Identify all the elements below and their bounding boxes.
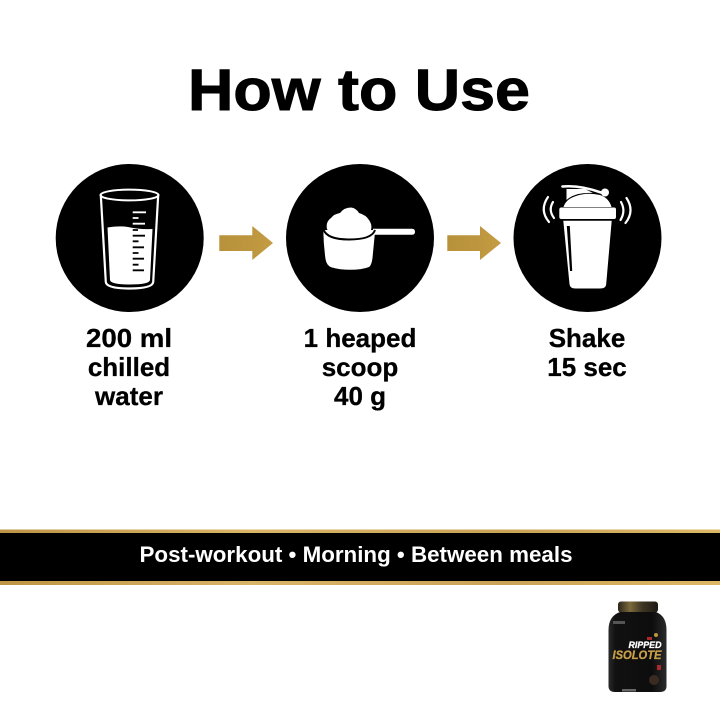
arrow: step 1 to 2 xyxy=(219,226,273,260)
icon: glass of water xyxy=(56,164,204,312)
label: 200 ml chilled water: water xyxy=(94,381,163,411)
step 2: scoop xyxy=(286,164,434,411)
label: Shake 15 sec: 15 sec xyxy=(547,352,627,382)
product jar: ISOLOTE xyxy=(612,648,662,662)
label: 200 ml chilled water: chilled xyxy=(88,352,170,382)
step 1: water xyxy=(56,164,204,411)
label: 200 ml chilled water xyxy=(86,323,172,411)
label: 1 heaped scoop 40 g xyxy=(304,323,416,411)
arrow: step 2 to 3 xyxy=(447,226,501,260)
label: 200 ml chilled water: 200 ml xyxy=(86,323,172,353)
product jar: RIPPED xyxy=(628,640,662,651)
banner text: Post-workout • Morning • Between meals xyxy=(140,542,572,567)
product jar xyxy=(608,602,666,692)
label: 1 heaped scoop 40 g: scoop xyxy=(322,352,398,382)
icon: shaker bottle xyxy=(514,164,662,312)
label: Shake 15 sec: Shake xyxy=(549,323,625,353)
label: 1 heaped scoop 40 g: 1 heaped xyxy=(304,323,416,353)
banner: usage times xyxy=(0,530,720,585)
icon: powder scoop xyxy=(286,164,434,312)
label: Shake 15 sec xyxy=(547,323,627,382)
step 3: shake xyxy=(514,164,662,382)
title: How to Use xyxy=(188,58,530,123)
label: 1 heaped scoop 40 g: 40 g xyxy=(334,381,386,411)
